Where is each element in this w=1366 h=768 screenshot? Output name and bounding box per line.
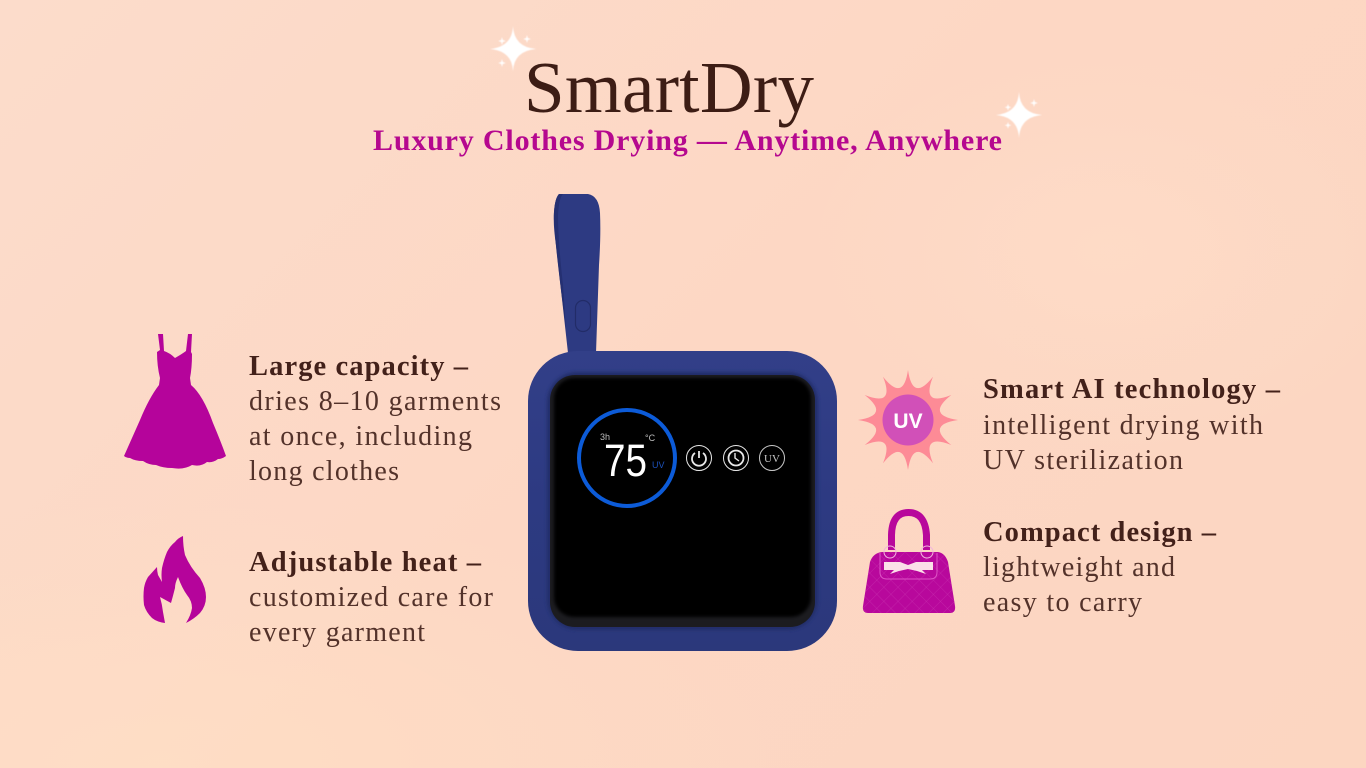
button: UV: UV — [764, 453, 780, 465]
text: large capacity — [249, 351, 501, 487]
button: timer — [724, 446, 748, 470]
panel: compact design feature — [863, 512, 1217, 618]
text: compact design — [983, 517, 1217, 618]
title: SmartDry — [524, 47, 814, 128]
icon: UV sun: UV — [893, 410, 923, 433]
strap button — [576, 300, 590, 332]
text: compact design: lightweight and — [983, 552, 1175, 583]
display ring: 3h — [600, 432, 610, 442]
text: smart AI: intelligent drying with — [983, 410, 1263, 441]
subtitle: Luxury Clothes Drying — Anytime, Anywhere — [373, 124, 1002, 157]
icon: sparkle left — [490, 26, 536, 71]
text: compact design: Compact design – — [983, 517, 1217, 548]
icon: UV sun — [858, 370, 958, 470]
text: large capacity: long clothes — [249, 456, 399, 487]
device body — [528, 351, 837, 651]
text: smart AI — [983, 374, 1281, 476]
display ring — [579, 410, 675, 506]
inner bezel — [547, 372, 818, 630]
screen — [550, 375, 815, 627]
text: adjustable heat: every garment — [249, 617, 425, 648]
product: SmartDry device — [528, 194, 837, 651]
text: large capacity: Large capacity – — [249, 351, 469, 382]
text: large capacity: dries 8–10 garments — [249, 386, 501, 417]
button: UV — [760, 446, 784, 470]
display ring: UV — [652, 460, 665, 470]
display ring: 75 — [604, 435, 647, 486]
panel: adjustable heat feature — [144, 536, 494, 648]
text: adjustable heat — [249, 547, 494, 648]
panel: large capacity feature — [124, 334, 501, 487]
panel: smart AI feature — [858, 370, 1281, 476]
button: power — [686, 446, 712, 470]
icon: flame — [144, 536, 206, 623]
icon: sparkle right — [996, 92, 1042, 138]
text: smart AI: Smart AI technology – — [983, 374, 1281, 405]
text: adjustable heat: Adjustable heat – — [249, 547, 482, 578]
text: adjustable heat: customized care for — [249, 582, 494, 613]
strap — [554, 194, 600, 353]
text: large capacity: at once, including — [249, 421, 472, 452]
display ring: °C — [645, 433, 656, 443]
text: smart AI: UV sterilization — [983, 445, 1183, 476]
icon: handbag — [863, 512, 955, 613]
icon: dress — [124, 334, 226, 469]
text: compact design: easy to carry — [983, 587, 1142, 618]
